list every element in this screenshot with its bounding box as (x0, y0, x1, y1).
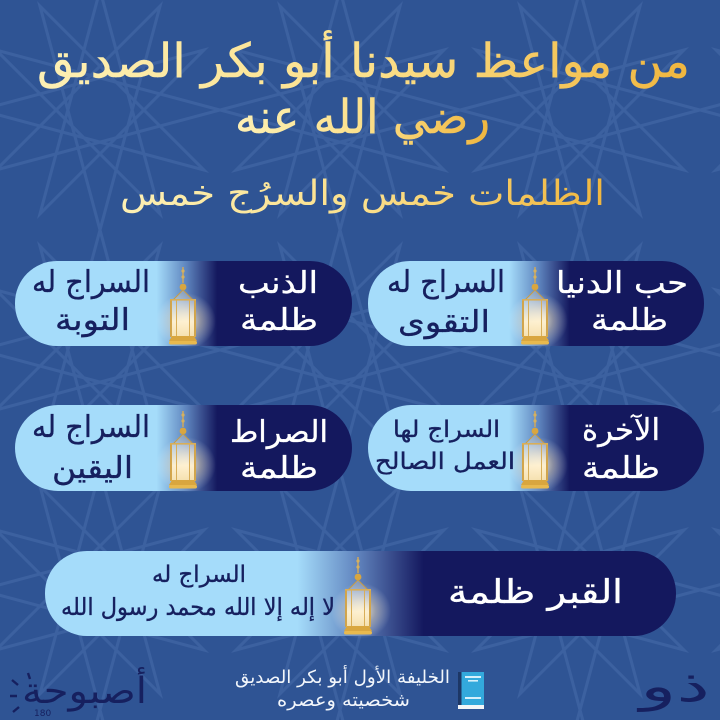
panel: hereafter: العمل الصالح (375, 449, 515, 475)
panel: bridge (15, 405, 352, 493)
panel: hereafter: الآخرة (582, 413, 660, 448)
footer credit: الخليفة الأول أبو بكر الصديق (235, 665, 450, 688)
panel: grave: لا إله إلا الله محمد رسول الله (61, 593, 335, 622)
panel: sin: الذنب (238, 266, 318, 301)
panel: world love: السراج له (387, 265, 505, 300)
icon: book (458, 672, 484, 709)
title: من مواعظ سيدنا أبو بكر الصديق (37, 30, 690, 89)
panel: bridge: اليقين (52, 451, 133, 486)
icon: lantern (156, 411, 216, 493)
panel: world love: حب الدنيا (556, 266, 688, 301)
panel: bridge: ظلمة (240, 451, 318, 486)
icon: lantern (331, 557, 391, 639)
panel: sin: السراج له (32, 265, 150, 300)
panel: grave: القبر ظلمة (448, 572, 623, 611)
title (37, 30, 690, 145)
panel: sin: التوبة (55, 303, 130, 338)
logo: left: 180 (34, 709, 51, 719)
panel: world love: ظلمة (591, 303, 668, 338)
logo: right: ذو (637, 661, 710, 712)
subtitle: الظلمات خمس والسرُج خمس (120, 174, 605, 214)
panel: bridge: السراج له (32, 410, 150, 445)
panel: hereafter: ظلمة (582, 451, 660, 486)
panel: world love: التقوى (398, 305, 490, 340)
icon: lantern (508, 267, 568, 349)
title: رضي الله عنه (235, 90, 490, 145)
panel: sin (15, 261, 352, 349)
panel: grave: السراج له (152, 562, 246, 588)
panel: grave (45, 551, 676, 639)
icon: lantern (508, 411, 568, 493)
logo: left (10, 667, 147, 719)
panel: hereafter (368, 405, 704, 493)
footer credit (235, 665, 450, 711)
panel: hereafter: السراج لها (393, 417, 500, 443)
panel: bridge: الصراط (230, 415, 328, 450)
icon: lantern (156, 267, 216, 349)
panel: sin: ظلمة (240, 303, 318, 338)
footer credit: شخصيته وعصره (277, 690, 410, 711)
panel: world love (368, 261, 704, 349)
logo: left: أصبوحة (22, 667, 147, 712)
